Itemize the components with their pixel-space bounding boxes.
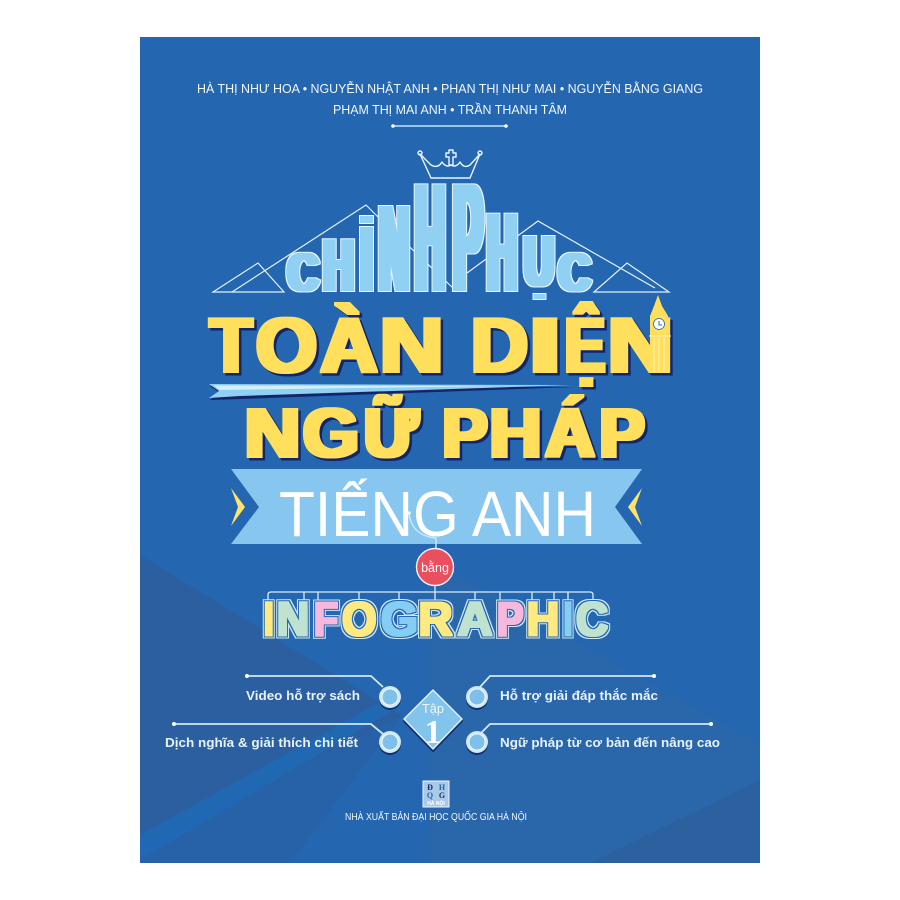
publisher name: NHÀ XUẤT BẢN ĐẠI HỌC QUỐC GIA HÀ NỘI — [345, 809, 527, 823]
publisher logo — [423, 781, 449, 807]
heading: Chinh Phục: N — [380, 181, 408, 318]
authors: HÀ THỊ NHƯ HOA • NGUYỄN NHẬT ANH • PHAN THỊ NHƯ MAI • NGUYỄN BẰNG GIANG — [197, 81, 703, 96]
Infographic word: N — [277, 594, 309, 646]
feature: Hỗ trợ giải đáp — [466, 674, 658, 710]
icon: crown — [418, 150, 482, 178]
publisher logo: Đ — [427, 783, 433, 792]
heading: Chinh Phục: C — [288, 241, 318, 303]
chevron right — [628, 488, 642, 526]
Infographic word — [264, 594, 608, 646]
mountain outlines — [213, 205, 669, 292]
Infographic word: H — [527, 594, 559, 646]
Infographic word: I — [564, 594, 572, 646]
heading: Toàn Diện: À — [320, 301, 378, 389]
feature: Ngữ pháp — [466, 722, 720, 755]
heading: Toàn Diện: N — [380, 301, 444, 389]
heading: Ngữ Pháp: H — [490, 394, 542, 472]
Infographic word: F — [314, 594, 338, 646]
publisher logo: G — [439, 791, 445, 800]
heading: Chinh Phục: C — [559, 241, 590, 303]
feature: Dịch nghĩa: Dịch nghĩa & giải thích chi tiết — [165, 735, 359, 750]
arrow swoosh — [209, 384, 573, 400]
publisher logo: H — [439, 783, 446, 792]
heading: Ngữ Pháp: N — [244, 394, 300, 472]
Infographic word: G — [381, 594, 418, 646]
feature: Ngữ pháp: Ngữ pháp từ cơ bản đến nâng cao — [500, 735, 720, 750]
publisher logo: Q — [427, 791, 433, 800]
heading: Chinh Phục: H — [488, 190, 516, 315]
bracket — [268, 585, 593, 600]
heading: Toàn Diện: T — [210, 301, 252, 389]
Infographic word: P — [497, 594, 524, 646]
Infographic word: C — [576, 594, 608, 646]
heading: Ngữ Pháp: G — [303, 394, 359, 472]
ribbon text: TIẾNG ANH — [279, 478, 596, 550]
heading: Chinh Phục — [288, 151, 590, 324]
heading: Chinh Phục: H — [324, 223, 354, 307]
volume diamond — [404, 690, 462, 751]
heading: Toàn Diện: Ệ — [565, 301, 605, 389]
heading: Chinh Phục: H — [416, 151, 444, 324]
badge — [416, 548, 454, 586]
bằng connector — [268, 511, 593, 600]
feature: Video hỗ trợ sách: Video hỗ trợ sách — [246, 688, 360, 703]
volume diamond: Tập — [422, 701, 444, 716]
Infographic word: R — [418, 594, 452, 646]
heading: Toàn Diện: D — [471, 301, 528, 389]
heading: Toàn Diện — [210, 301, 673, 389]
Infographic word: O — [342, 594, 376, 646]
authors — [197, 81, 703, 128]
heading: Toàn Diện: O — [256, 301, 317, 389]
icon: Big Ben tower — [649, 295, 671, 372]
heading: Ngữ Pháp: P — [600, 394, 644, 472]
heading: Chinh Phục: U — [524, 222, 554, 302]
feature: Dịch nghĩa — [165, 722, 401, 755]
chevron left — [231, 488, 245, 526]
heading: Chinh Phục: P — [454, 151, 482, 324]
heading: Ngữ Pháp — [244, 394, 644, 472]
book cover background — [140, 37, 760, 863]
heading: Ngữ Pháp: Ữ — [364, 394, 419, 472]
Infographic word: A — [458, 594, 492, 646]
authors: PHẠM THỊ MAI ANH • TRẦN THANH TÂM — [333, 102, 567, 117]
heading: Ngữ Pháp: P — [442, 394, 488, 472]
heading: Toàn Diện: I — [527, 301, 563, 389]
heading: Ngữ Pháp: Á — [546, 394, 594, 472]
Infographic word: I — [264, 594, 274, 646]
feature: Video hỗ trợ sách — [245, 674, 401, 710]
ribbon: Tiếng Anh — [231, 469, 642, 550]
feature: Hỗ trợ giải đáp: Hỗ trợ giải đáp thắc mắc — [500, 688, 658, 703]
bằng connector: bằng — [421, 560, 449, 575]
volume diamond: 1 — [424, 714, 442, 751]
heading: Toàn Diện: N — [607, 301, 673, 389]
publisher logo: HÀ NỘI — [427, 799, 445, 807]
